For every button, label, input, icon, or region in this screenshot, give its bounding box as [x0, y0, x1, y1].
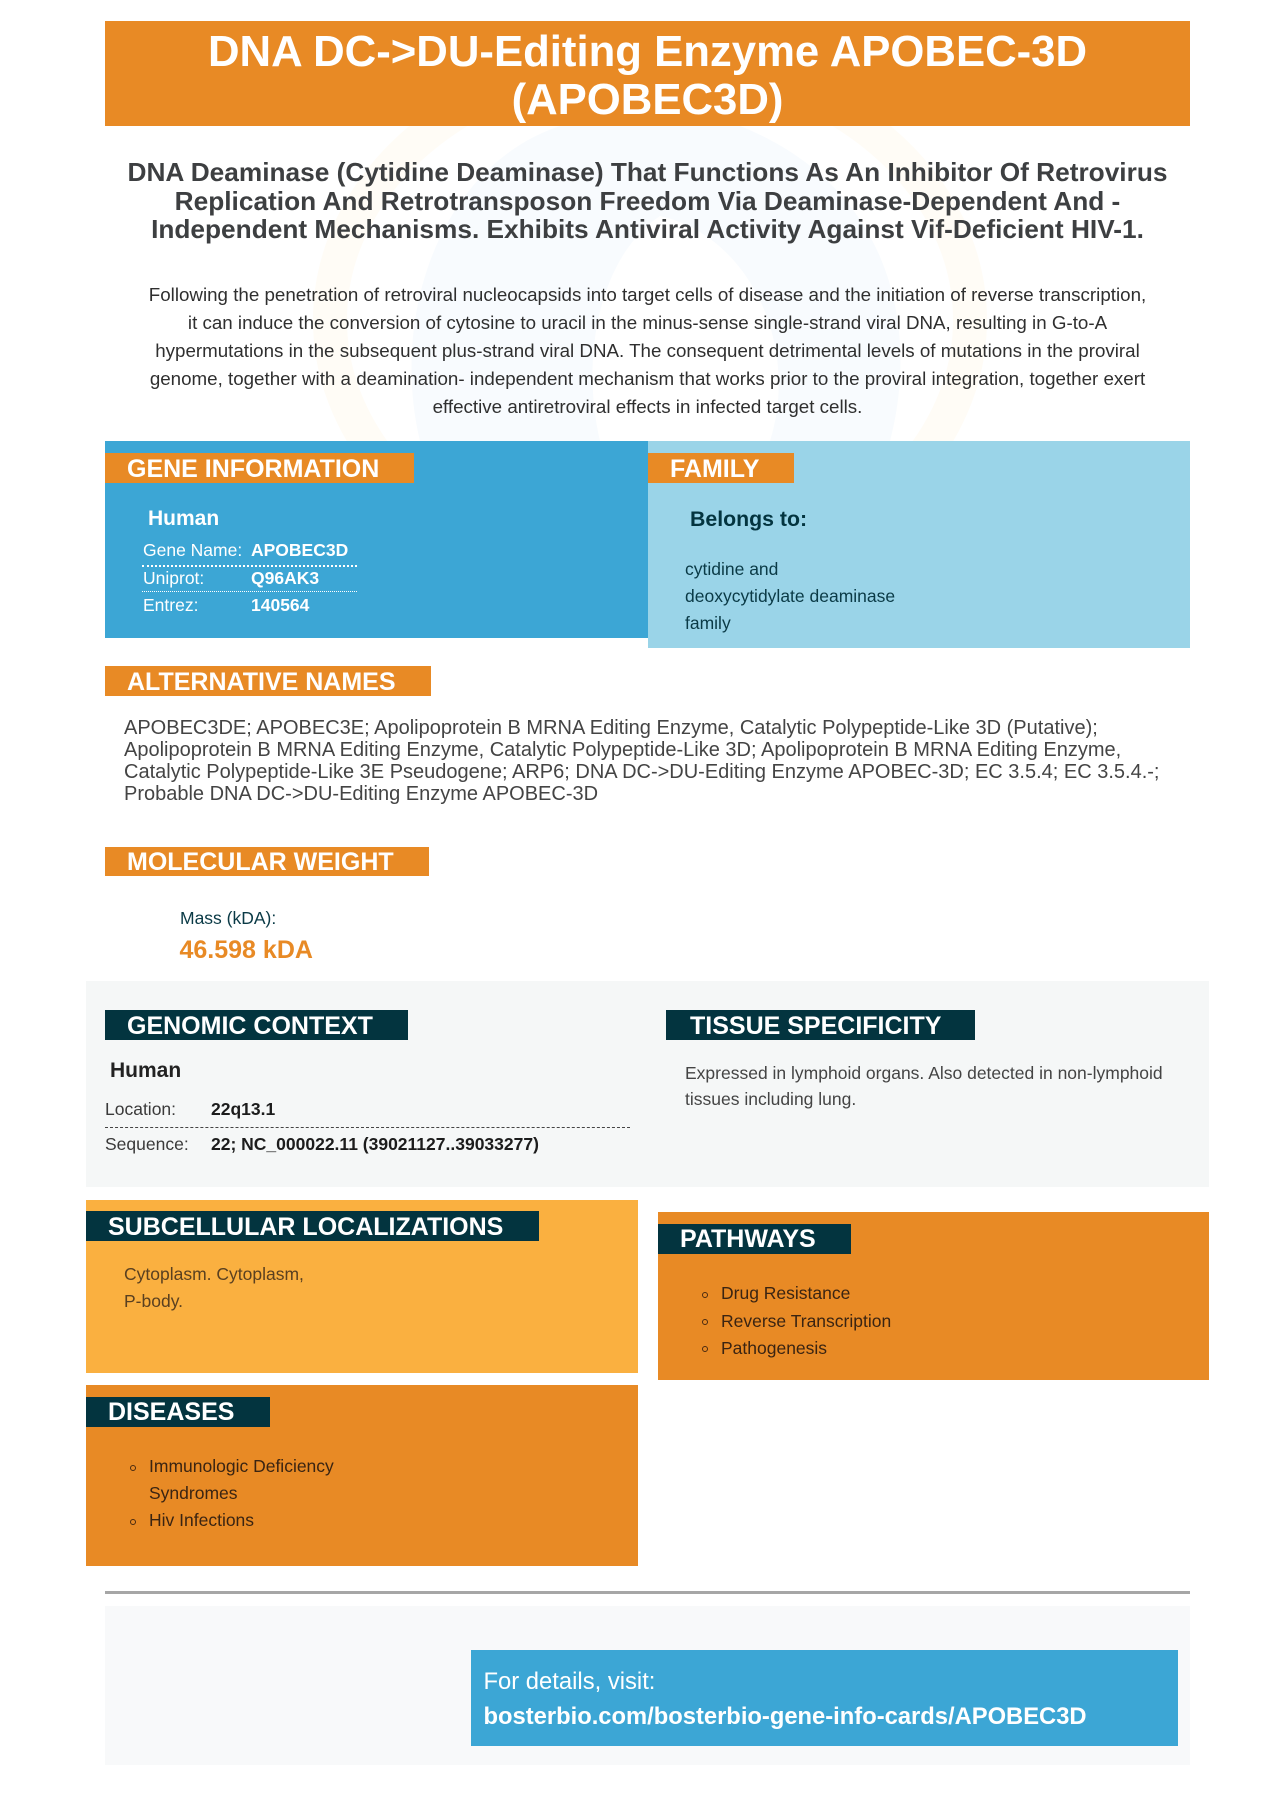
family text [685, 559, 895, 633]
heading: subcellular localizations: SUBCELLULAR LOCALIZATIONS [108, 1213, 503, 1241]
heading: alternative names: ALTERNATIVE NAMES [127, 668, 396, 696]
belongs to label: Belongs to: [690, 507, 807, 531]
species label: Human [148, 507, 219, 530]
gene info table [142, 540, 357, 615]
alternative names text: Apolipoprotein B MRNA Editing Enzyme, Catalytic Polypeptide-Like 3D; Apolipoprotein B MRNA Editing Enzyme, [124, 739, 1121, 761]
background watermark logo [313, 126, 987, 441]
heading: molecular weight: MOLECULAR WEIGHT [127, 848, 394, 876]
alternative names text [124, 717, 1159, 805]
subcellular text: P-body. [124, 1291, 183, 1311]
heading: genomic context: GENOMIC CONTEXT [127, 1012, 373, 1040]
title: DNA DC->DU-Editing Enzyme APOBEC-3D [208, 27, 1087, 76]
description paragraph: hypermutations in the subsequent plus-strand viral DNA. The consequent detrimental levels of mutations in the proviral [155, 340, 1140, 361]
genomic table [105, 1099, 630, 1154]
gene info table: Gene Name: [143, 540, 242, 560]
gene info table: 140564 [251, 595, 309, 615]
family text: cytidine and [685, 559, 778, 579]
subcellular text [124, 1264, 304, 1311]
description paragraph: Following the penetration of retroviral nucleocapsids into target cells of disease and the initiation of reverse transcription, [149, 284, 1146, 305]
panel: diseases [86, 1385, 638, 1566]
heading: gene information: GENE INFORMATION [127, 455, 379, 483]
genomic table: 22; NC_000022.11 (39021127..39033277) [211, 1134, 539, 1154]
description paragraph: effective antiretroviral effects in infected target cells. [433, 396, 862, 417]
diseases list: Syndromes [149, 1483, 238, 1503]
panel: family [648, 441, 1190, 648]
description paragraph: genome, together with a deamination- independent mechanism that works prior to the proviral integration, together exert [150, 368, 1145, 389]
diseases list [130, 1456, 334, 1530]
callout label: For details, visit: [484, 1668, 655, 1695]
heading: pathways [658, 1224, 851, 1254]
pathways list [702, 1283, 891, 1358]
tissue specificity text [685, 1063, 1163, 1109]
callout: details link [471, 1650, 1178, 1746]
subtitle [128, 157, 1167, 244]
title: (APOBEC3D) [512, 75, 783, 124]
tissue specificity text: Expressed in lymphoid organs. Also detected in non-lymphoid [685, 1063, 1163, 1083]
panel: gene information [105, 441, 648, 638]
family text: family [685, 613, 731, 633]
pathways list: Pathogenesis [721, 1338, 827, 1358]
subtitle: Independent Mechanisms. Exhibits Antiviral Activity Against Vif-Deficient HIV-1. [151, 214, 1144, 244]
panel: genomic context and tissue specificity [86, 981, 1209, 1187]
diseases list: Hiv Infections [149, 1510, 254, 1530]
panel: footer [105, 1606, 1190, 1765]
heading: pathways: PATHWAYS [680, 1225, 816, 1253]
heading: diseases: DISEASES [108, 1398, 234, 1426]
heading: family: FAMILY [670, 455, 759, 483]
callout url: bosterbio.com/bosterbio-gene-info-cards/APOBEC3D [484, 1703, 1087, 1730]
subcellular text: Cytoplasm. Cytoplasm, [124, 1264, 304, 1284]
mass label: Mass (kDA): [180, 908, 276, 928]
mass value: 46.598 kDA [180, 936, 313, 964]
gene info table: APOBEC3D [251, 540, 348, 560]
gene info table: Uniprot: [143, 568, 204, 588]
diseases list: Immunologic Deficiency [149, 1456, 334, 1476]
species label: Human [110, 1059, 181, 1082]
subtitle: Replication And Retrotransposon Freedom Via Deaminase-Dependent And - [175, 186, 1120, 216]
gene info table: Entrez: [143, 595, 198, 615]
title [105, 21, 1190, 126]
panel: pathways [658, 1212, 1209, 1380]
genomic table: Location: [105, 1099, 176, 1119]
family text: deoxycytidylate deaminase [685, 586, 895, 606]
alternative names text: Probable DNA DC->DU-Editing Enzyme APOBEC-3D [124, 783, 598, 805]
heading: tissue specificity: TISSUE SPECIFICITY [690, 1012, 941, 1040]
alternative names text: APOBEC3DE; APOBEC3E; Apolipoprotein B MRNA Editing Enzyme, Catalytic Polypeptide-Like 3D (Putative); [124, 717, 1098, 739]
description paragraph [149, 284, 1146, 417]
tissue specificity text: tissues including lung. [685, 1089, 856, 1109]
subtitle: DNA Deaminase (Cytidine Deaminase) That Functions As An Inhibitor Of Retrovirus [128, 157, 1167, 187]
gene info table: Q96AK3 [251, 568, 319, 588]
genomic table: Sequence: [105, 1134, 189, 1154]
heading: diseases [86, 1397, 270, 1427]
alternative names text: Catalytic Polypeptide-Like 3E Pseudogene; ARP6; DNA DC->DU-Editing Enzyme APOBEC-3D; EC 3.5.4; EC 3.5.4.-; [124, 761, 1159, 783]
pathways list: Drug Resistance [721, 1283, 850, 1303]
heading: family [648, 453, 794, 483]
pathways list: Reverse Transcription [721, 1311, 891, 1331]
panel: subcellular localizations [86, 1200, 638, 1373]
description paragraph: it can induce the conversion of cytosine to uracil in the minus-sense single-strand viral DNA, resulting in G-to-A [188, 312, 1107, 333]
genomic table: 22q13.1 [211, 1099, 275, 1119]
